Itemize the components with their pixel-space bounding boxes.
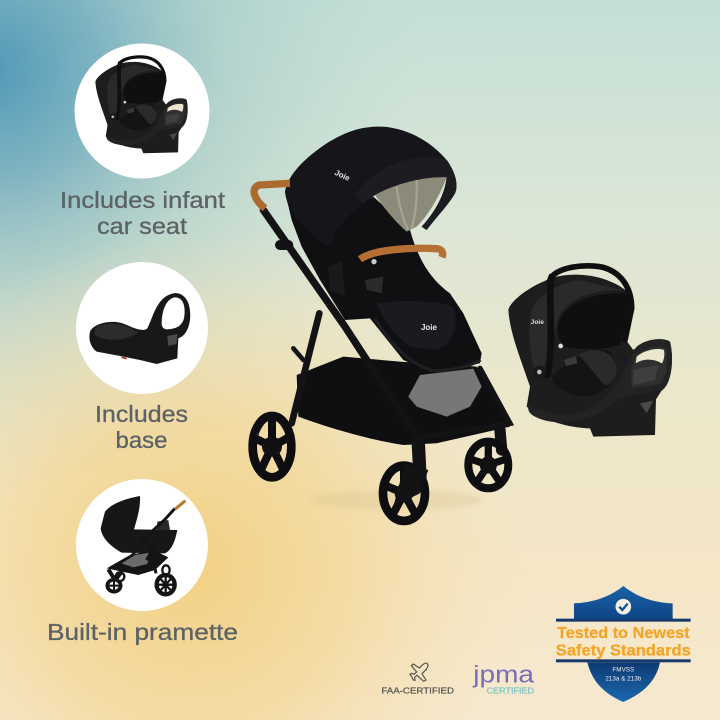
footrest edge — [375, 318, 481, 371]
icon: car seat base in circle — [76, 262, 208, 394]
canopy — [285, 127, 457, 247]
canopy logo: Joie — [333, 168, 352, 183]
label: includes infant car seat: Includes infant — [60, 187, 226, 213]
icon: airplane outline — [410, 663, 428, 681]
panel: pramette feature — [47, 479, 238, 645]
badge headline: Safety Standards — [556, 642, 691, 659]
JPMA certified mark — [472, 662, 535, 695]
seat logo: Joie — [421, 323, 438, 332]
stroller ground shadow — [310, 490, 483, 510]
FAA text: FAA-CERTIFIED — [381, 686, 454, 695]
badge standards text: 213a & 213b — [605, 676, 642, 683]
label: includes base: Includes — [95, 401, 188, 427]
FAA certified mark — [381, 663, 454, 695]
side holder — [328, 262, 345, 297]
shield bottom — [587, 662, 660, 702]
jpma wordmark: jpma — [472, 662, 535, 689]
label: includes base: base — [116, 427, 168, 453]
panel: infant car seat feature — [60, 44, 226, 239]
stroller frame — [263, 210, 510, 477]
label: built-in pramette: Built-in pramette — [47, 619, 238, 645]
harness buckle — [365, 277, 383, 293]
stroller seat back — [285, 192, 482, 373]
front right wheel — [468, 442, 508, 488]
label: includes infant car seat: car seat — [97, 213, 188, 239]
front fork — [393, 463, 428, 507]
lower band — [556, 659, 691, 662]
upper band — [556, 619, 691, 622]
jpma certified text: CERTIFIED — [487, 686, 534, 695]
shield top — [574, 586, 673, 619]
front left wheel — [383, 466, 425, 521]
safety standards shield badge — [556, 586, 691, 702]
stroller basket — [297, 357, 510, 445]
front arm bar leather — [360, 248, 443, 259]
seat cushion — [377, 301, 456, 350]
canopy mesh window — [375, 177, 447, 232]
stroller — [252, 127, 510, 521]
icon: pramette in circle — [76, 479, 208, 611]
large infant car seat — [508, 266, 672, 437]
badge standards text: FMVSS — [612, 666, 634, 673]
rear wheel — [252, 416, 291, 477]
icon: infant car seat in circle — [74, 44, 210, 178]
panel: base feature — [76, 262, 208, 453]
car seat logo: Joie — [531, 319, 544, 326]
icon: check mark — [615, 599, 631, 614]
badge headline: Tested to Newest — [557, 625, 690, 642]
rear handle leather — [254, 183, 290, 208]
basket grey panel — [408, 369, 482, 417]
